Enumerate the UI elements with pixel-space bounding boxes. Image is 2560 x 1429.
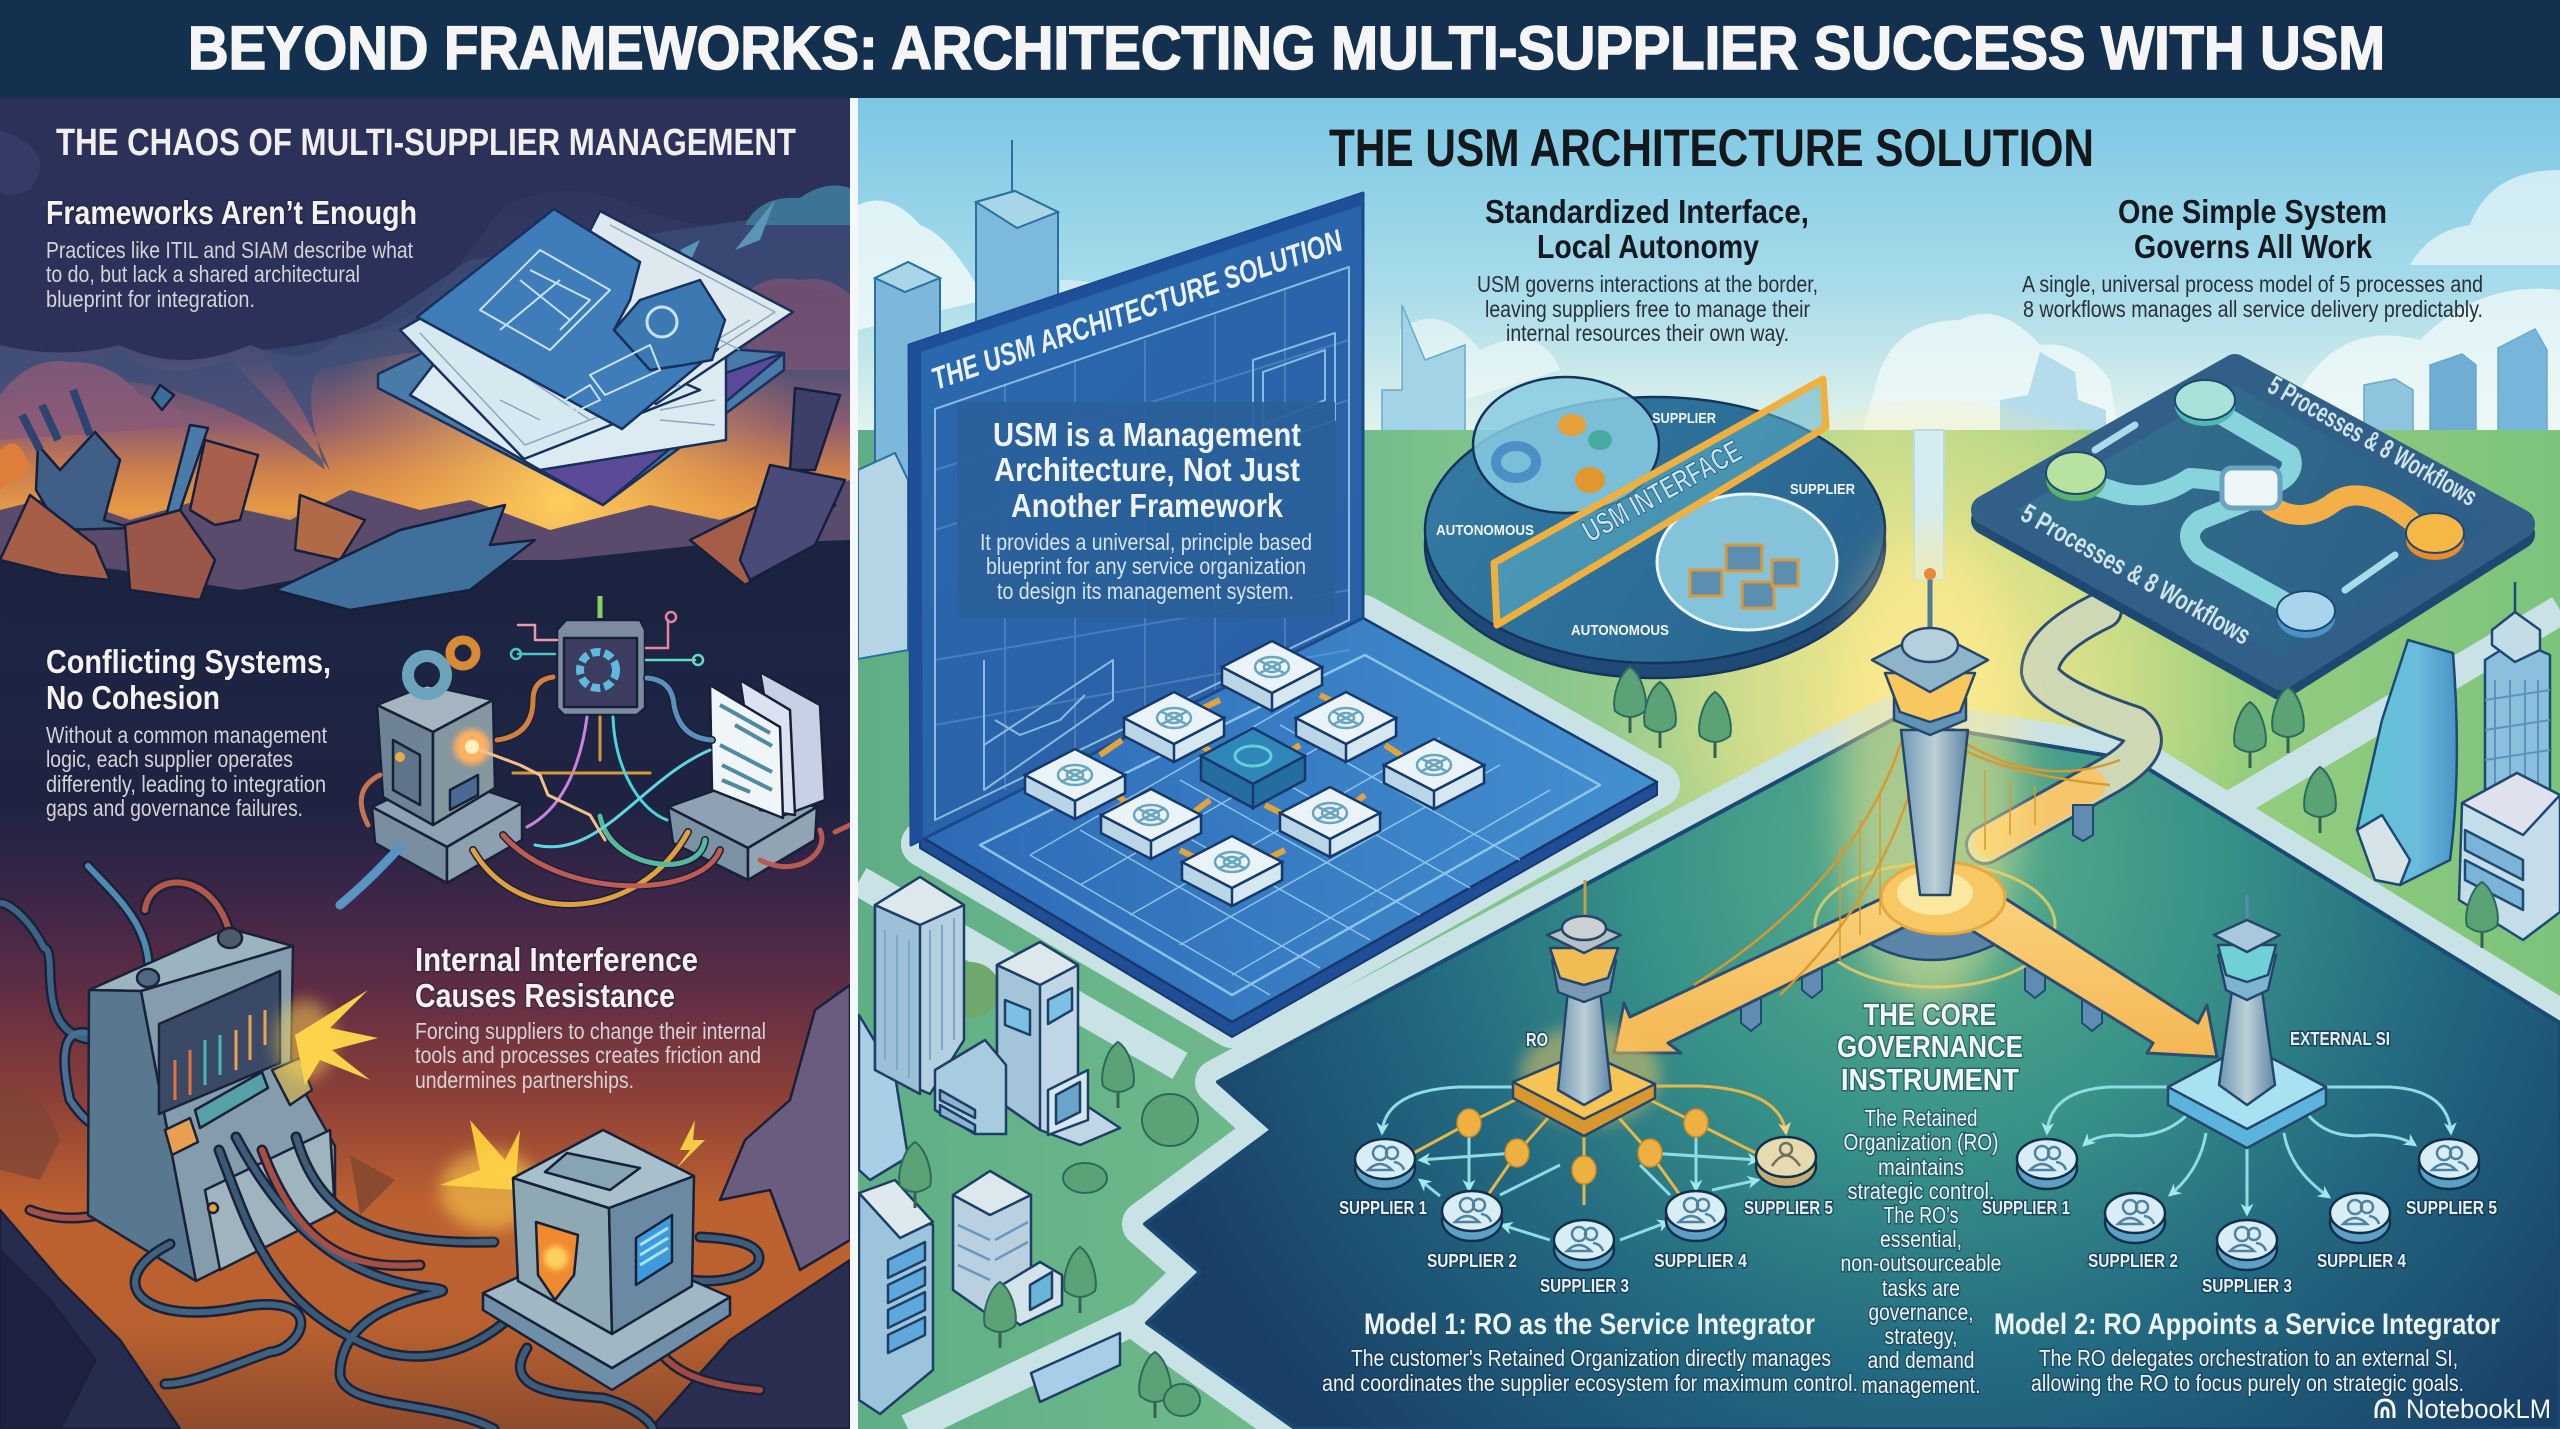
supplier labels: model 1: RO	[1526, 1030, 1548, 1050]
storm clouds	[0, 98, 850, 490]
text block: standardized interface: internal resources their own way.	[1506, 320, 1789, 346]
arrow: to model 1	[1614, 888, 1925, 1053]
trees: left district	[899, 1042, 1200, 1418]
dome: network	[1657, 494, 1837, 630]
text block: internal interference: Causes Resistance	[415, 977, 675, 1014]
text block: internal interference: tools and processes creates friction and	[415, 1042, 761, 1068]
text block: conflicting systems: No Cohesion	[46, 679, 220, 716]
supplier discs: model 2	[2017, 1139, 2479, 1270]
text block: model 2	[1994, 1308, 2500, 1396]
text: section heading: THE CHAOS OF MULTI-SUPPLIER MANAGEMENT	[56, 122, 796, 164]
dish labels: AUTONOMOUS	[1571, 622, 1669, 639]
text block: standardized interface	[1477, 193, 1818, 346]
supplier labels: model 2: EXTERNAL SI	[2290, 1029, 2390, 1049]
supplier labels: model 1	[1339, 1030, 1833, 1296]
dome: gears	[1473, 377, 1659, 513]
icon: document machine	[668, 672, 825, 880]
text block: USM is a management architecture: to design its management system.	[997, 578, 1294, 604]
text block: model 1: and coordinates the supplier ecosystem for maximum control.	[1322, 1370, 1858, 1396]
diagram: model 1 RO as service integrator	[1339, 880, 1833, 1296]
text block: internal interference: Internal Interference	[415, 941, 698, 978]
text block: model 2: allowing the RO to focus purely on strategic goals.	[2031, 1370, 2464, 1396]
logo: NotebookLM: NotebookLM	[2406, 1394, 2551, 1424]
text block: core governance instrument: Organization (RO)	[1844, 1129, 1998, 1155]
text block: core governance instrument: strategic control.	[1848, 1178, 1994, 1204]
supplier labels: model 2: SUPPLIER 2	[2088, 1251, 2178, 1271]
supplier labels: model 2: SUPPLIER 5	[2406, 1198, 2497, 1218]
text block: core governance instrument	[1837, 997, 2023, 1398]
diagram: model 2 RO appoints a service integrator	[1982, 895, 2497, 1296]
tower: central hub with bridge arms	[1614, 530, 2217, 1057]
text block: core governance instrument: tasks are	[1882, 1275, 1960, 1301]
text block: conflicting systems: gaps and governance failures.	[46, 795, 303, 821]
title banner	[0, 0, 2560, 98]
text block: model 2: The RO delegates orchestration to an external SI,	[2039, 1345, 2458, 1371]
dish labels: SUPPLIER	[1652, 410, 1716, 427]
panel: the USM architecture solution	[858, 98, 2560, 1429]
text block: internal interference	[415, 941, 766, 1093]
text block: frameworks aren't enough	[46, 194, 417, 312]
text block: frameworks aren't enough: to do, but lack a shared architectural	[46, 261, 360, 287]
text block: internal interference: Forcing suppliers to change their internal	[415, 1018, 766, 1044]
supplier labels: model 1: SUPPLIER 3	[1540, 1276, 1629, 1296]
background towers behind the wall	[858, 140, 1058, 659]
supplier labels: model 2: SUPPLIER 4	[2317, 1251, 2406, 1271]
text block: standardized interface: Local Autonomy	[1537, 228, 1760, 265]
text block: model 1	[1322, 1308, 1858, 1396]
text block: core governance instrument: and demand	[1868, 1347, 1974, 1373]
supplier labels: model 2	[1982, 1029, 2497, 1296]
text block: one simple system: Governs All Work	[2134, 228, 2373, 265]
text block: USM is a management architecture	[980, 416, 1312, 604]
text block: standardized interface: USM governs interactions at the border,	[1477, 271, 1818, 297]
text block: core governance instrument: governance,	[1868, 1299, 1974, 1325]
diagram: process board	[1986, 369, 2520, 685]
text block: frameworks aren't enough: Frameworks Aren’t Enough	[46, 194, 417, 231]
text block: model 1: The customer's Retained Organization directly manages	[1351, 1345, 1831, 1371]
text block: one simple system: One Simple System	[2118, 193, 2387, 230]
bridge piers	[1741, 805, 2102, 1031]
green land	[858, 430, 2560, 1429]
text block: model 1: Model 1: RO as the Service Integrator	[1364, 1308, 1815, 1341]
title: BEYOND FRAMEWORKS: ARCHITECTING MULTI-SUPPLIER SUCCESS WITH USM	[188, 14, 2385, 82]
text block: conflicting systems	[46, 643, 331, 821]
supplier labels: model 1: SUPPLIER 4	[1654, 1251, 1747, 1271]
supplier discs: model 1	[1355, 1137, 1816, 1270]
text block: standardized interface: Standardized Interface,	[1485, 193, 1809, 230]
text block: conflicting systems: differently, leading to integration	[46, 771, 326, 797]
divider	[850, 98, 858, 1429]
supplier labels: model 1: SUPPLIER 2	[1427, 1251, 1517, 1271]
text block: core governance instrument: The RO’s	[1884, 1202, 1958, 1228]
text block: USM is a management architecture: It provides a universal, principle based	[980, 529, 1312, 555]
text block: one simple system: 8 workflows manages all service delivery predictably.	[2023, 296, 2483, 322]
text block: frameworks aren't enough: blueprint for integration.	[46, 286, 255, 312]
text block: core governance instrument: management.	[1862, 1372, 1980, 1398]
text block: USM is a management architecture: Architecture, Not Just	[994, 451, 1300, 488]
text block: one simple system	[2022, 193, 2483, 322]
text block: standardized interface: leaving suppliers free to manage their	[1485, 296, 1810, 322]
bridge cables	[1694, 733, 2120, 995]
workflow path	[2076, 405, 2410, 605]
text block: core governance instrument: THE CORE	[1864, 997, 1996, 1032]
icon: stack of torn blueprints	[378, 209, 793, 505]
supplier labels: model 2: SUPPLIER 1	[1982, 1198, 2070, 1218]
text block: conflicting systems: Without a common management	[46, 722, 328, 748]
arrow: to model 2	[1950, 895, 2217, 1057]
roads	[859, 610, 2560, 1429]
distant skyline	[1381, 304, 2548, 430]
cables on the ground	[135, 1137, 760, 1429]
text block: core governance instrument: maintains	[1878, 1154, 1964, 1180]
wall heading: THE USM ARCHITECTURE SOLUTION	[927, 223, 1347, 397]
panel: the chaos of multi-supplier management	[0, 98, 850, 1429]
text block: USM is a management architecture: Another Framework	[1011, 487, 1284, 524]
text block: USM is a management architecture: blueprint for any service organization	[986, 553, 1306, 579]
gate label: USM INTERFACE	[1576, 433, 1747, 549]
ground cracks and rocks	[0, 985, 850, 1429]
dish labels	[1436, 410, 1855, 639]
text block: core governance instrument: GOVERNANCE	[1837, 1029, 2023, 1064]
module blocks on the blueprint floor	[1025, 641, 1484, 906]
text block: core governance instrument: essential,	[1880, 1226, 1962, 1252]
USM interface gate	[1494, 379, 1826, 625]
text block: conflicting systems: Conflicting Systems,	[46, 643, 331, 680]
icon: sparks	[275, 990, 705, 1230]
board label: bottom edge: 5 Processes & 8 Workflows	[2016, 498, 2256, 650]
text block: frameworks aren't enough: Practices like ITIL and SIAM describe what	[46, 237, 414, 263]
trees: right district	[2234, 687, 2498, 948]
tower: RO	[1513, 880, 1655, 1136]
icon: control panel machine with cables	[0, 866, 335, 1281]
supplier labels: model 1: SUPPLIER 1	[1339, 1198, 1427, 1218]
text block: core governance instrument: The Retained	[1864, 1105, 1978, 1131]
heading: the USM architecture solution: THE USM ARCHITECTURE SOLUTION	[1329, 119, 2094, 178]
trees: near the dish	[1614, 667, 1731, 758]
ruins and rubble	[0, 385, 850, 630]
text block: one simple system: A single, universal process model of 5 processes and	[2022, 271, 2483, 297]
road and bridge from board to hub	[1985, 610, 2143, 845]
supplier labels: model 2: SUPPLIER 3	[2202, 1276, 2292, 1296]
text block: conflicting systems: logic, each supplier operates	[46, 746, 293, 772]
text block: core governance instrument: non-outsourceable	[1840, 1250, 2002, 1276]
icon: left machine	[372, 640, 522, 883]
clouds	[858, 170, 2560, 440]
supplier labels: model 1: SUPPLIER 5	[1744, 1198, 1833, 1218]
text block: core governance instrument: INSTRUMENT	[1841, 1062, 2019, 1097]
icon: monitor with gear	[557, 620, 645, 715]
diagram: USM interface dish	[1425, 377, 1885, 678]
blueprint wall and floor	[909, 193, 1657, 1037]
vertical road to the horizon	[1914, 430, 1944, 580]
tower: external SI	[2168, 895, 2326, 1148]
text block: core governance instrument: strategy,	[1884, 1323, 1958, 1349]
dish labels: SUPPLIER	[1790, 481, 1855, 498]
dish labels: AUTONOMOUS	[1436, 522, 1534, 539]
right-side city buildings	[2357, 582, 2560, 940]
text block: internal interference: undermines partnerships.	[415, 1067, 634, 1093]
lower-left city buildings	[859, 877, 1120, 1414]
icon: shielded cube system	[483, 1130, 730, 1390]
water around the hub	[1145, 720, 2560, 1429]
text block: USM is a management architecture: USM is a Management	[993, 416, 1301, 453]
icon: conflicting systems machines	[340, 596, 850, 905]
wall inset panel	[957, 402, 1335, 618]
